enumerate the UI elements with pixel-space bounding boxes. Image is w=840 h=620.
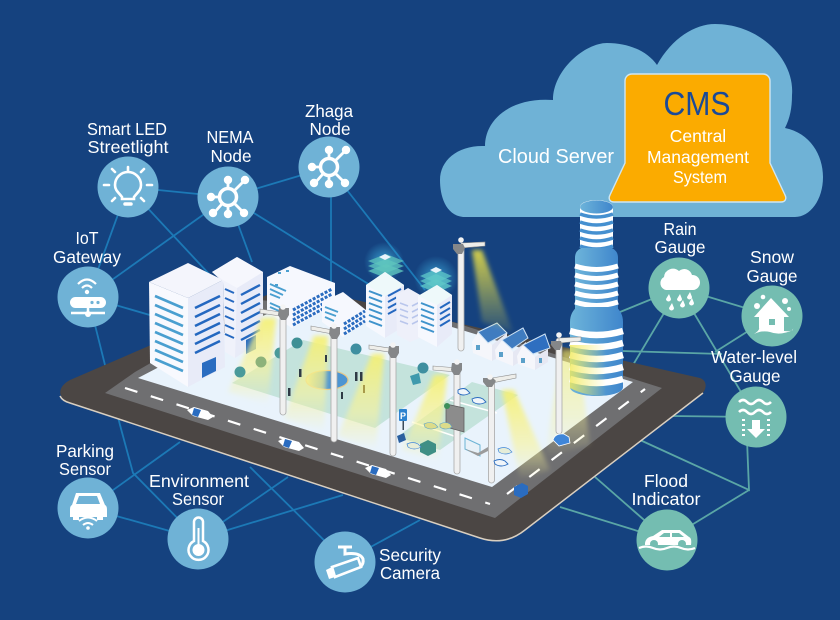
node: Parking Sensor: Sensor [59,459,111,479]
icon: thermometer [188,518,208,560]
node: Rain Gauge: Gauge [654,237,706,257]
trees [234,338,428,378]
people [288,355,365,399]
node: Snow Gauge: Gauge [746,266,798,286]
tower glow [570,345,606,396]
building: low office block front [322,292,366,337]
node: NEMA Node: NEMA [206,127,254,147]
node: Smart LED Streetlight: Streetlight [88,137,169,157]
node: Rain Gauge: Rain [664,219,696,239]
street lamps [260,237,581,483]
road [105,300,662,518]
cloud server [440,24,823,217]
tower bottom tier [570,307,623,396]
node: Security Camera: Security [379,545,441,565]
node: Water-level Gauge [711,347,797,448]
network lines: green connections [560,288,772,540]
network lines: blue connections [88,167,425,561]
node: Snow Gauge: Snow [750,247,794,267]
node: IoT Gateway [53,228,121,328]
plaza ground [138,300,633,487]
CMS description: Central [670,126,726,146]
node: NEMA Node: Node [210,146,252,166]
node: Zhaga Node: Zhaga [305,101,353,121]
cars [187,388,570,498]
node: Water-level Gauge: Water-level [711,347,797,367]
building: tall tower left [149,263,225,387]
tower top tier [580,200,613,248]
parking sign: P [400,411,406,421]
building: low office block [267,266,335,328]
cloud label: Cloud Server [498,146,614,168]
node: Zhaga Node [298,101,360,198]
tower B [396,288,422,342]
icon: car with signal [70,493,107,530]
light cones [228,250,590,480]
sensor layer stacks [368,259,404,273]
node: Security Camera [314,532,441,592]
icon: car in flood [639,530,695,550]
node: IoT Gateway: IoT [76,228,99,248]
CMS description [647,126,749,187]
city platform [60,285,706,541]
building: second tower [212,257,263,358]
icon: rain cloud [660,269,700,310]
node: IoT Gateway: Gateway [53,247,121,267]
node: Zhaga Node: Node [310,119,350,139]
tower A [366,272,404,338]
icon: hub network [208,177,248,217]
tower middle tier [575,248,618,310]
CMS description: System [673,167,727,187]
node: Environment Sensor: Environment [149,471,249,491]
node: Parking Sensor: Parking [56,441,114,461]
node: Parking Sensor [56,441,118,538]
house 1 [472,332,492,361]
node: Snow Gauge [742,247,802,346]
node: Flood Indicator: Flood [644,471,688,491]
building group: Zhaga towers with node halos [364,242,458,347]
house windows [476,345,542,363]
node: Smart LED Streetlight: Smart LED [87,119,167,139]
CMS laptop panel [609,74,786,202]
pond [306,370,348,390]
node: Environment Sensor [149,471,249,570]
house 2 [495,340,513,366]
node: NEMA Node [198,127,258,228]
icon: light bulb [104,167,152,204]
road dashes [125,388,490,504]
node: Flood Indicator [632,471,701,570]
node: Environment Sensor: Sensor [172,489,224,509]
node: Security Camera: Camera [380,563,440,583]
parking sign [399,409,407,430]
node: Flood Indicator: Indicator [632,489,701,509]
icon: cctv camera [326,547,363,579]
node: Water-level Gauge: Gauge [730,366,780,386]
CMS heading: CMS [664,85,730,122]
green plaza zones [232,340,450,428]
houses with solar panels [472,323,550,370]
icon: hub network [309,147,349,187]
icon: water level arrow [739,400,771,438]
CMS description: Management [647,147,749,167]
signal cabinet on lamp [446,404,464,432]
node: Rain Gauge [648,219,710,318]
central tower [570,200,623,396]
display kiosk and bins [397,373,488,456]
icon: house in snow [754,295,793,334]
node: Smart LED Streetlight [87,119,169,218]
house 3 [517,345,535,370]
icon: wifi router [70,280,106,317]
tower C [418,285,452,347]
